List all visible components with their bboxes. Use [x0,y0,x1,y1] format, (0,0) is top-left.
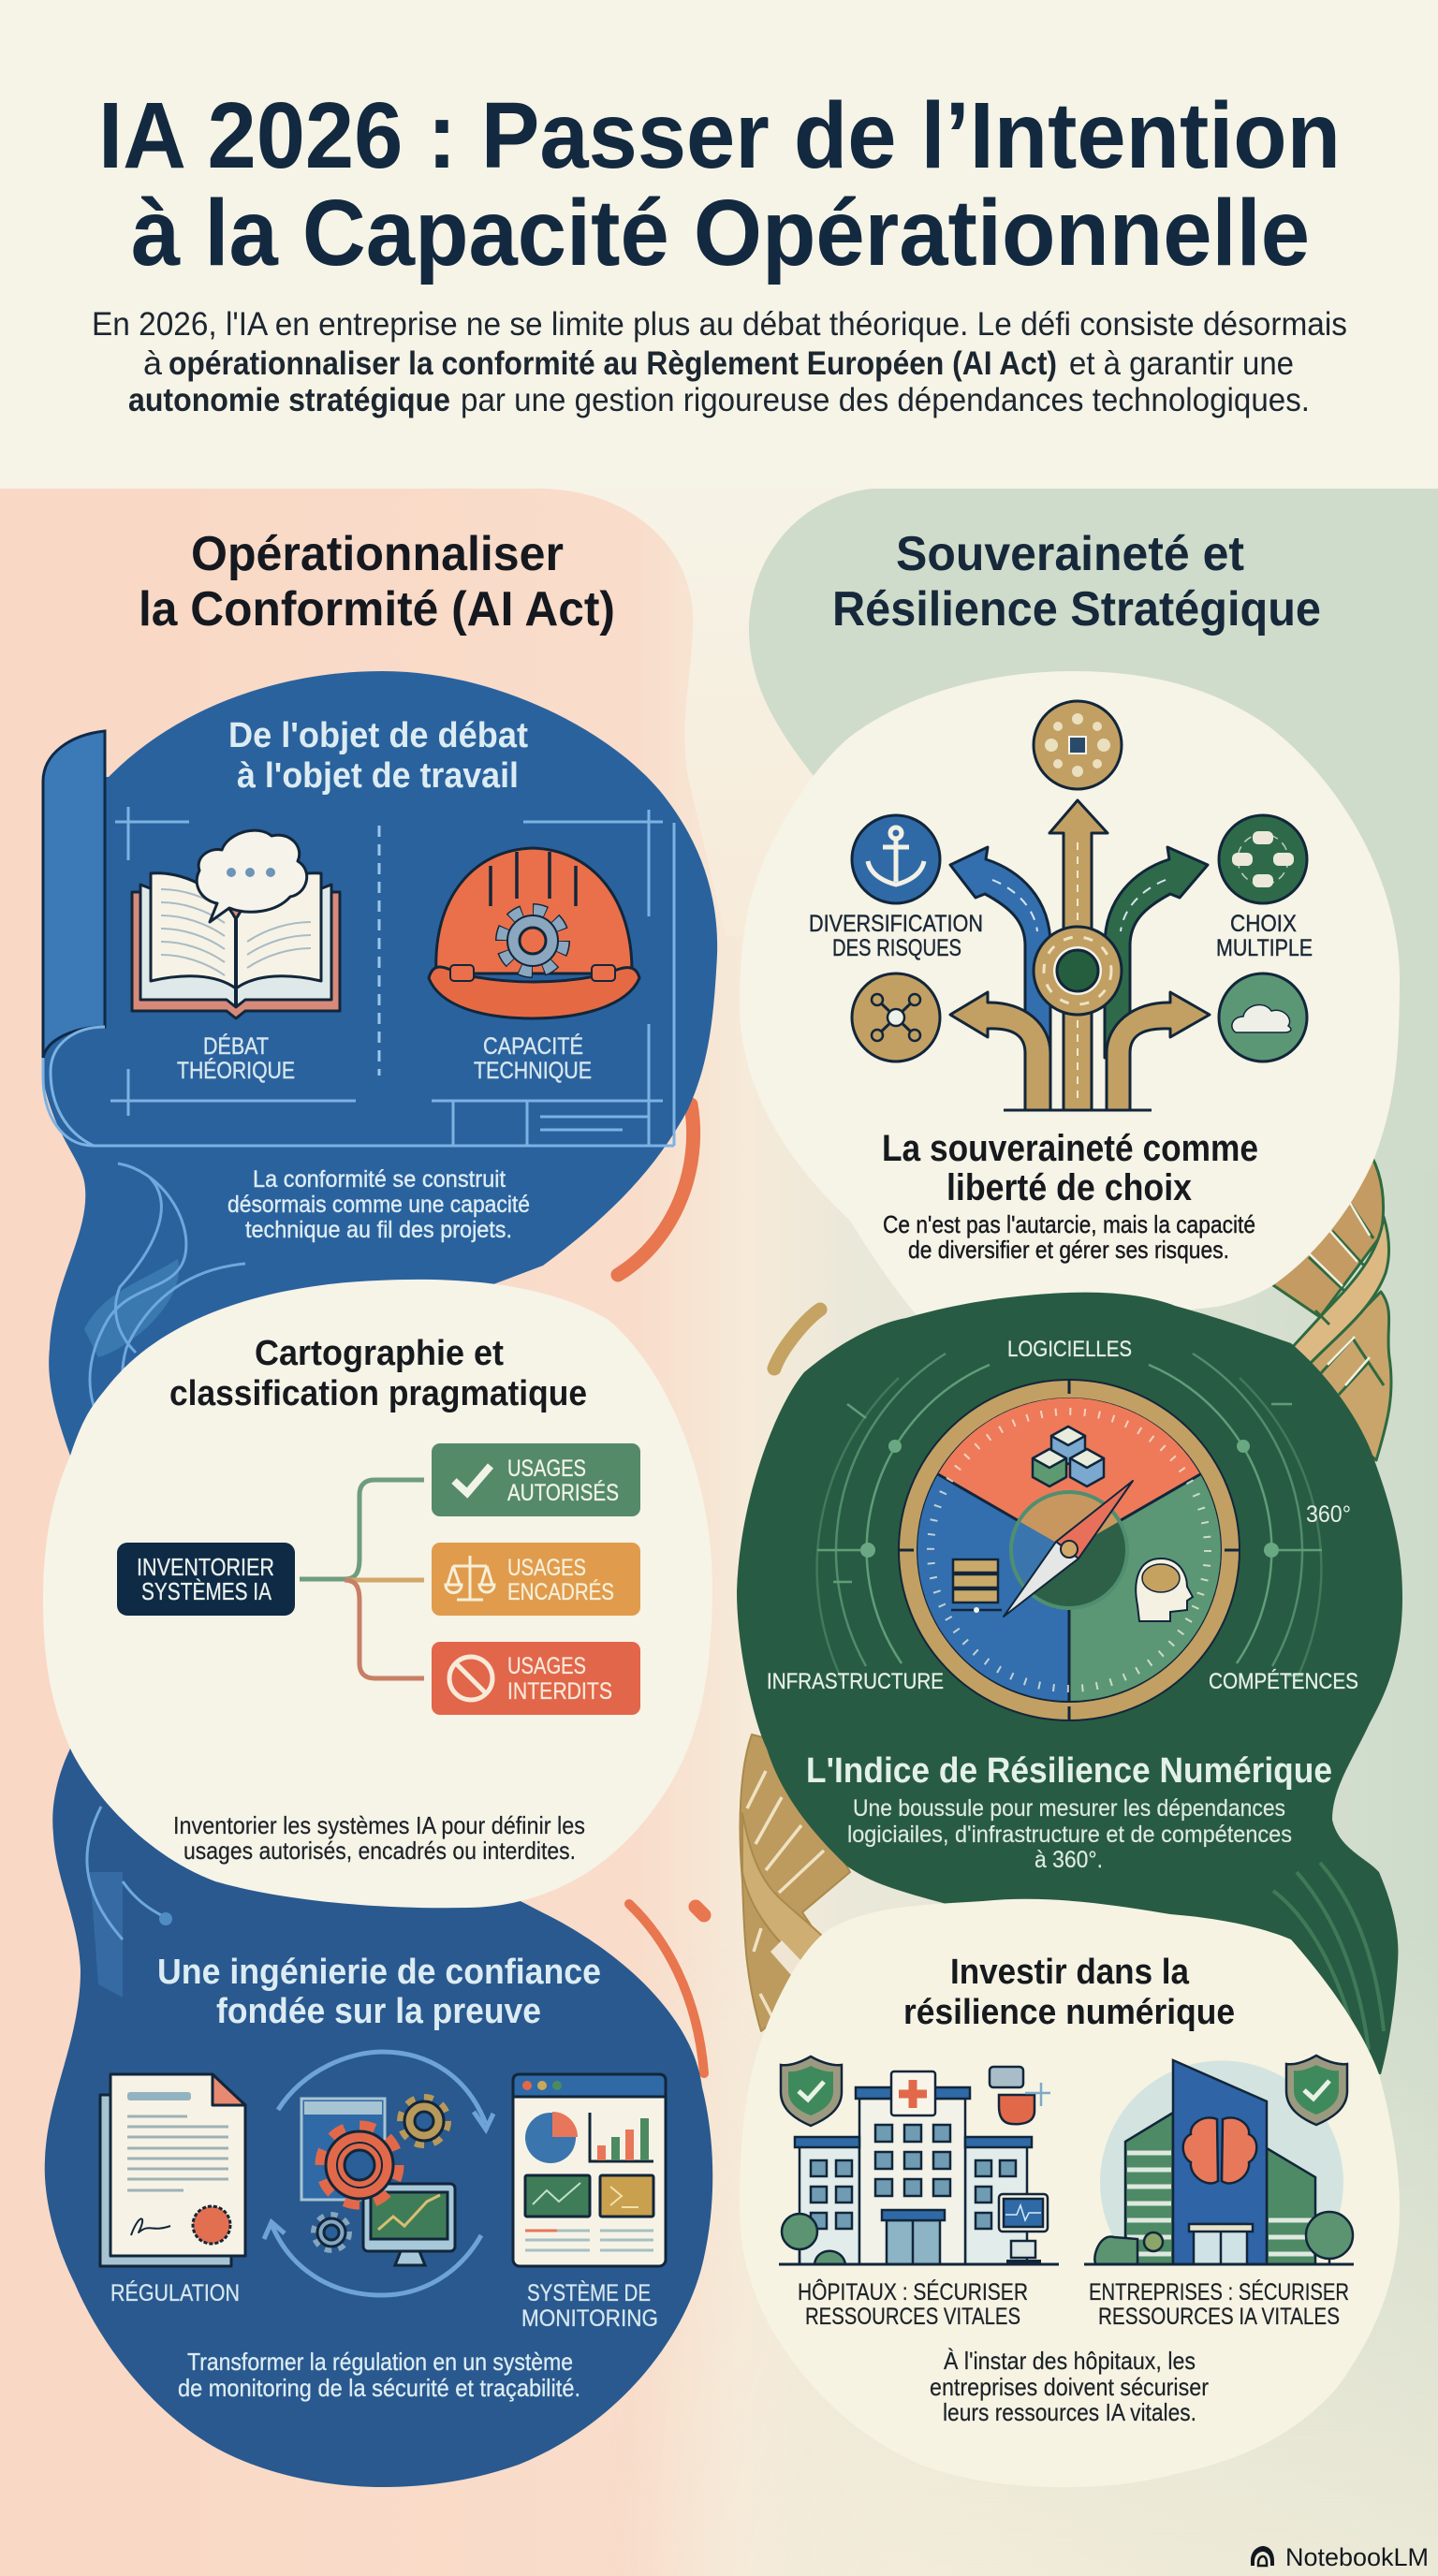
label: Choix multiple [1216,911,1313,961]
label: Logicielles: LOGICIELLES [1007,1337,1132,1362]
text: inventorier: usages autorisés, encadrés ou interdites. [183,1837,576,1865]
icon: enterprise shield [1286,2056,1347,2125]
icon: orange hard hat with gear [429,848,639,1018]
panel: investir dans la résilience [740,1899,1400,2487]
coral brush strokes [618,1105,704,2073]
text: boussole [847,1795,1292,1873]
text: à l'instar: entreprises doivent sécuriser [930,2373,1209,2401]
text: conformité: désormais comme une capacité [227,1192,530,1218]
panel: green blob with compass [737,1293,1402,2074]
text: à l'instar [930,2347,1209,2426]
box: Inventorier systèmes IA: INVENTORIER [137,1553,274,1581]
text: boussole: à 360°. [1034,1847,1103,1873]
icon: monitoring dashboard [513,2074,666,2266]
label: Capacité technique [474,1032,592,1084]
box: usages encadrés: USAGES [507,1555,586,1581]
blueprint lines [110,807,674,1146]
icon: cluster circle [1219,815,1307,903]
intro text: par une gestion rigoureuse des dépendances technologiques. [461,382,1310,418]
panel: souveraineté comme liberté de choix [740,671,1400,1339]
text: transformer la régulation: Transformer la régulation en un système [187,2348,573,2376]
arcs around compass [817,1354,1322,1681]
heading: investir: résilience numérique [903,1993,1235,2032]
text: à l'instar: À l'instar des hôpitaux, les [944,2347,1196,2375]
label: hôpitaux [798,2278,1028,2330]
label: entreprises: ENTREPRISES : SÉCURISER [1089,2278,1349,2305]
label: Choix multiple: CHOIX [1230,911,1297,937]
left column heading: Opérationnaliser la Conformité: la Conformité (AI Act) [139,582,615,637]
text: conformité: technique au fil des projets. [245,1217,512,1243]
text: inventorier: Inventorier les systèmes IA pour définir les [173,1811,585,1839]
icon: server rack [951,1559,1002,1613]
label: Système de monitoring: SYSTÈME DE [527,2279,651,2306]
heading: Cartographie [169,1334,587,1413]
left column heading: Opérationnaliser la Conformité: Opérationnaliser [191,527,564,581]
box: usages interdits [432,1642,640,1715]
text: boussole: logiciailes, d'infrastructure et de compétences [847,1822,1292,1848]
panel: blue blob De l'objet de débat [43,671,717,1456]
box: usages autorisés [432,1443,640,1516]
text: inventorier [173,1811,585,1865]
heading: Indice de Résilience: L'Indice de Résilience Numérique [806,1751,1332,1791]
connector tree [300,1480,424,1678]
icon: open book with speech bubble [132,830,340,1018]
intro text [92,306,1347,418]
box: Inventorier systèmes IA: SYSTÈMES IA [141,1577,272,1605]
title: IA 2026 : Passer de l’Intention [98,83,1341,188]
heading: De l'objet de débat [228,716,528,796]
box: usages autorisés: AUTORISÉS [507,1479,619,1506]
box: usages autorisés: USAGES [507,1456,586,1482]
box: usages interdits: USAGES [507,1653,586,1679]
heading: De l'objet de débat: De l'objet de débat [228,716,528,755]
icon: network circle [1034,701,1122,789]
panel: Cartographie et classification [43,1280,712,1908]
label: Choix multiple: MULTIPLE [1216,935,1313,961]
icon: gold braid upper right [1217,1156,1391,1460]
icon: cubes [1033,1427,1104,1486]
label: hôpitaux: RESSOURCES VITALES [805,2304,1020,2330]
compass needle [1004,1481,1133,1617]
label: Régulation: RÉGULATION [110,2279,240,2306]
icon: blueprint scroll [43,731,674,1146]
label: Diversification des risques: DIVERSIFICATION [809,911,983,937]
icon: hospital [779,2071,1059,2264]
label: Débat théorique: DÉBAT [203,1032,269,1060]
icon: nodes circle [852,973,940,1061]
left column heading: Opérationnaliser la Conformité [139,527,615,637]
icon: anchor circle [852,815,940,903]
heading: souveraineté: liberté de choix [946,1167,1192,1208]
label: Diversification des risques [809,911,983,961]
heading: investir [903,1953,1235,2032]
icon: head with brain [1136,1559,1193,1621]
feather swirl [84,1164,245,1432]
label: entreprises: RESSOURCES IA VITALES [1098,2304,1340,2330]
right column heading: Souveraineté et Résilience Stratégique [832,527,1321,637]
panel: blue blob ingénierie de confiance [45,1749,712,2487]
label: 360°: 360° [1306,1501,1351,1528]
icon: gears and monitor [301,2099,455,2265]
label: Capacité technique: CAPACITÉ [483,1032,583,1060]
label: Compétences: COMPÉTENCES [1209,1669,1358,1694]
compass hub [1011,1491,1127,1608]
intro text: autonomie stratégique [128,382,450,418]
icon: hospital shield [781,2056,842,2126]
text: autarcie: Ce n'est pas l'autarcie, mais la capacité [883,1210,1255,1238]
title: à la Capacité Opérationnelle [131,181,1310,285]
label: Débat théorique: THÉORIQUE [177,1057,295,1084]
text: transformer la régulation: de monitoring de la sécurité et traçabilité. [178,2374,580,2402]
intro text: En 2026, l'IA en entreprise ne se limite plus au débat théorique. Le défi consiste désormais [92,306,1347,343]
chart: compass dial [899,1379,1240,1721]
icon: gold braid lower left [740,1734,850,2031]
box: usages interdits: INTERDITS [507,1678,612,1705]
label: Système de monitoring: MONITORING [521,2305,658,2332]
label: Capacité technique: TECHNIQUE [474,1058,592,1084]
NotebookLM logo: NotebookLM [1285,2543,1429,2571]
label: hôpitaux: HÔPITAUX : SÉCURISER [798,2278,1028,2305]
box: usages encadrés: ENCADRÉS [507,1578,614,1605]
heading: ingénierie de confiance: fondée sur la preuve [216,1992,541,2031]
heading: Cartographie: Cartographie et [255,1334,504,1373]
text: conformité: La conformité se construit [253,1166,506,1193]
intro text: à [143,345,163,382]
text: autarcie: de diversifier et gérer ses risques. [908,1236,1229,1264]
heading: ingénierie de confiance: Une ingénierie de confiance [157,1953,601,1992]
heading: souveraineté: La souveraineté comme [882,1128,1258,1169]
text: autarcie [883,1210,1255,1264]
right column heading: Souveraineté et Résilience Stratégique: Souveraineté et [896,527,1244,581]
intro text: et à garantir une [1069,345,1294,382]
heading: souveraineté [882,1128,1258,1208]
swirl lines [87,1807,172,1998]
heading: De l'objet de débat: à l'objet de travail [237,756,519,796]
text: à l'instar: leurs ressources IA vitales. [943,2398,1196,2426]
intro text: opérationnaliser la conformité au Règlement Européen (AI Act) [169,345,1057,382]
icon: cloud circle [1219,973,1307,1061]
icon: regulation document [100,2074,245,2266]
box: usages encadrés [432,1543,640,1616]
label: Infrastructure: INFRASTRUCTURE [767,1669,944,1694]
text: conformité [227,1166,530,1243]
label: Débat théorique [177,1032,295,1084]
heading: ingénierie de confiance [157,1953,601,2031]
box: Inventorier systèmes IA [117,1543,295,1616]
icon: cycle arrows [264,2052,493,2295]
heading: investir: Investir dans la [950,1953,1190,1992]
text: boussole: Une boussule pour mesurer les dépendances [853,1795,1285,1822]
gold brush stroke [774,1310,820,1368]
label: entreprises [1089,2278,1349,2330]
icon: medical devices [990,2067,1050,2261]
heading: Cartographie: classification pragmatique [169,1374,587,1413]
label: Système de monitoring [521,2279,658,2332]
text: transformer la régulation [178,2348,580,2402]
right column heading: Souveraineté et Résilience Stratégique: Résilience Stratégique [832,582,1321,637]
title [98,83,1341,285]
label: Diversification des risques: DES RISQUES [832,935,961,961]
icon: road arrows [950,800,1210,1110]
icon: enterprise building [1084,2060,1354,2264]
